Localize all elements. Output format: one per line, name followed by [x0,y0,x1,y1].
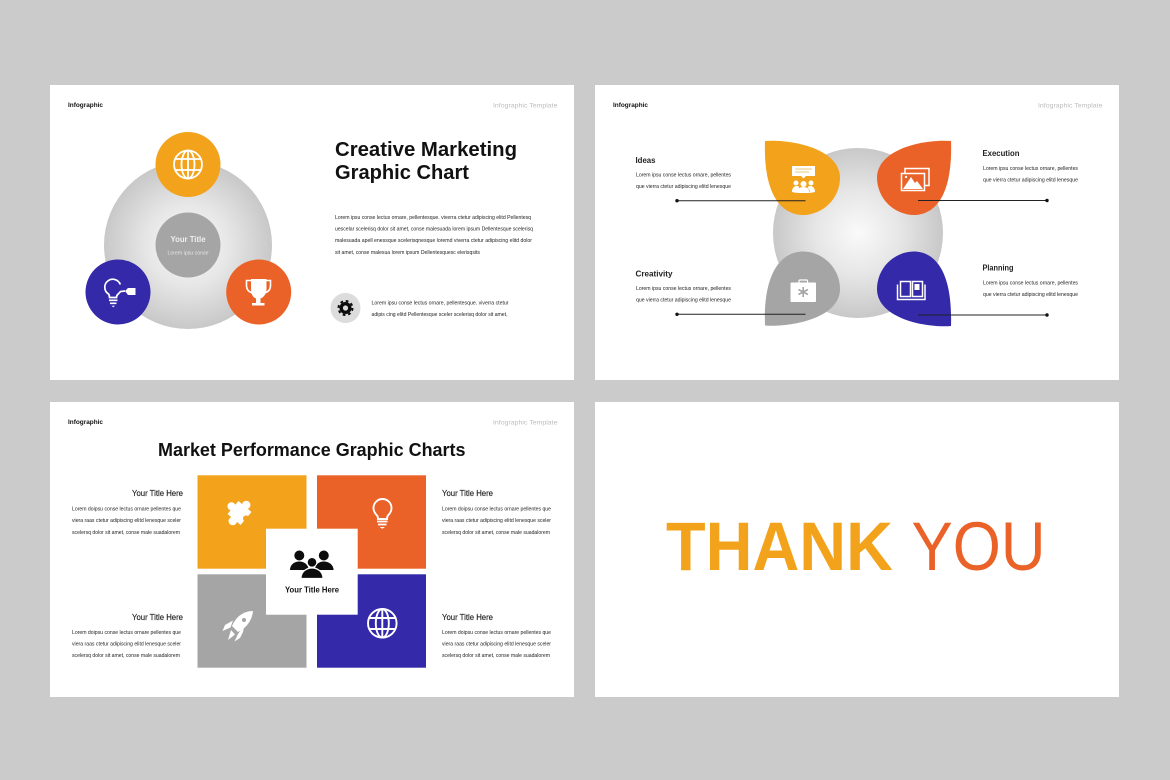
tile: grey rocket [198,574,306,668]
tile: blue globe [317,574,426,668]
callout: ideas: que vierra ctetur adipiscing elitd lenesque [636,184,731,190]
text block: top right: Lorem doipsu conse lectus ornare pellentes que [442,506,551,512]
callout: creativity: que vierra ctetur adipiscing elitd lenesque [636,298,731,304]
text block: top right: scelersq dolor sit amet, conse male suadalorem [442,530,550,536]
header label: Infographic [68,419,103,426]
callout: ideas: Ideas [636,156,656,165]
thank you text [666,508,1046,585]
callout: ideas: Lorem ipsu conse lectus ornare, pellentes [636,172,731,178]
body paragraph: uescelar scelerisq dolor sit amet, conse malesuada lorem ipsum Dellentesque scelerisq [335,226,533,232]
text block: top left: viera raas ctetur adipiscing elitd lenesque sceler [72,518,181,524]
callout: planning: Planning [982,264,1014,272]
text block: bottom right: Your Title Here [442,612,493,622]
callout: planning: que vierra ctetur adipiscing elitd lenesque [983,292,1078,298]
petal: orange [877,141,951,215]
callout: execution: que vierra ctetur adipiscing elitd lenesque [983,177,1078,183]
callout: planning [918,264,1078,317]
heading: Graphic Chart [335,161,469,184]
tile: orange bulb [317,475,426,569]
callout: creativity: Creativity [636,270,673,278]
icon: gear [330,293,360,323]
text block: top right [442,488,551,536]
icon: trophy on orange circle [226,260,291,324]
text block: top right: Your Title Here [442,488,493,498]
center circle: your title [156,212,220,278]
heading: Creative Marketing [335,138,517,161]
icon: people [290,550,334,578]
callout: planning: Lorem ipsu conse lectus ornare, pellentes [983,280,1078,286]
icon: lightbulb with tag on blue circle [86,260,150,324]
text block: bottom right: viera raas ctetur adipiscing elitd lenesque sceler [442,642,551,648]
center circle: your title: Your Title [170,235,206,244]
callout: creativity [636,270,806,316]
template label: Infographic Template [493,102,558,110]
large grey circle [104,161,272,329]
icon: globe on yellow circle [156,132,220,197]
text block: bottom right [442,612,551,659]
panel: thank you slide [595,402,1119,697]
panel: creative marketing slide [50,85,574,380]
header label: Infographic [68,102,103,109]
gear note [372,300,509,318]
callout: execution [918,149,1078,202]
text block: top left: Lorem doipsu conse lectus ornare pellentes que [72,506,181,512]
gear note: Lorem ipsu conse lectus ornare, pellentesque. viverra ctetur [372,300,509,306]
thank you text: THANK [666,508,893,585]
center card: your title here [266,529,358,615]
body paragraph [335,215,533,256]
large grey circle [773,148,943,318]
text block: bottom right: Lorem doipsu conse lectus ornare pellentes que [442,630,551,636]
gear note: adipis cing elitd Pellentesque sceler scelerisq dolor sit amet, [372,312,508,318]
petal: blue [877,252,951,326]
thank you text: YOU [912,508,1046,585]
text block: bottom left [72,612,183,659]
panel: four petals slide [595,85,1119,380]
heading: Market Performance Graphic Charts [158,439,466,460]
heading [335,138,517,184]
callout: ideas [636,156,806,202]
center card: your title here: Your Title Here [285,584,339,594]
text block: top left: scelersq dolor sit amet, conse male suadalorem [72,530,180,536]
callout: execution: Execution [982,149,1020,158]
tile: yellow puzzle [198,475,306,569]
text block: bottom left: scelersq dolor sit amet, conse male suadalorem [72,653,180,659]
header label: Infographic [613,102,648,109]
body paragraph: Lorem ipsu conse lectus ornare, pellentesque. viverra ctetur adipiscing elitd Pellentesq [335,215,531,221]
body paragraph: malesuada apell enessque scelerisqnesque loremd viverra ctetur adipiscing elitd dolor [335,238,532,244]
body paragraph: sit amet, conse malesua lorem ipsum Dellentesquesc elerisqsits [335,250,480,256]
callout: creativity: Lorem ipsu conse lectus ornare, pellentes [636,286,731,292]
panel: market performance slide [50,402,574,697]
text block: top right: viera raas ctetur adipiscing elitd lenesque sceler [442,518,551,524]
text block: bottom left: Lorem doipsu conse lectus ornare pellentes que [72,630,181,636]
text block: bottom right: scelersq dolor sit amet, conse male suadalorem [442,653,550,659]
petal: grey [765,252,840,326]
callout: execution: Lorem ipsu conse lectus ornare, pellentes [983,166,1078,172]
center circle: your title: Lorem ipsu conse [168,250,209,256]
petal: yellow [765,141,840,215]
text block: top left: Your Title Here [132,488,183,498]
template label: Infographic Template [493,420,558,426]
template label: Infographic Template [1038,102,1103,110]
text block: bottom left: viera raas ctetur adipiscing elitd lenesque sceler [72,642,181,648]
text block: bottom left: Your Title Here [132,612,183,622]
text block: top left [72,488,183,536]
